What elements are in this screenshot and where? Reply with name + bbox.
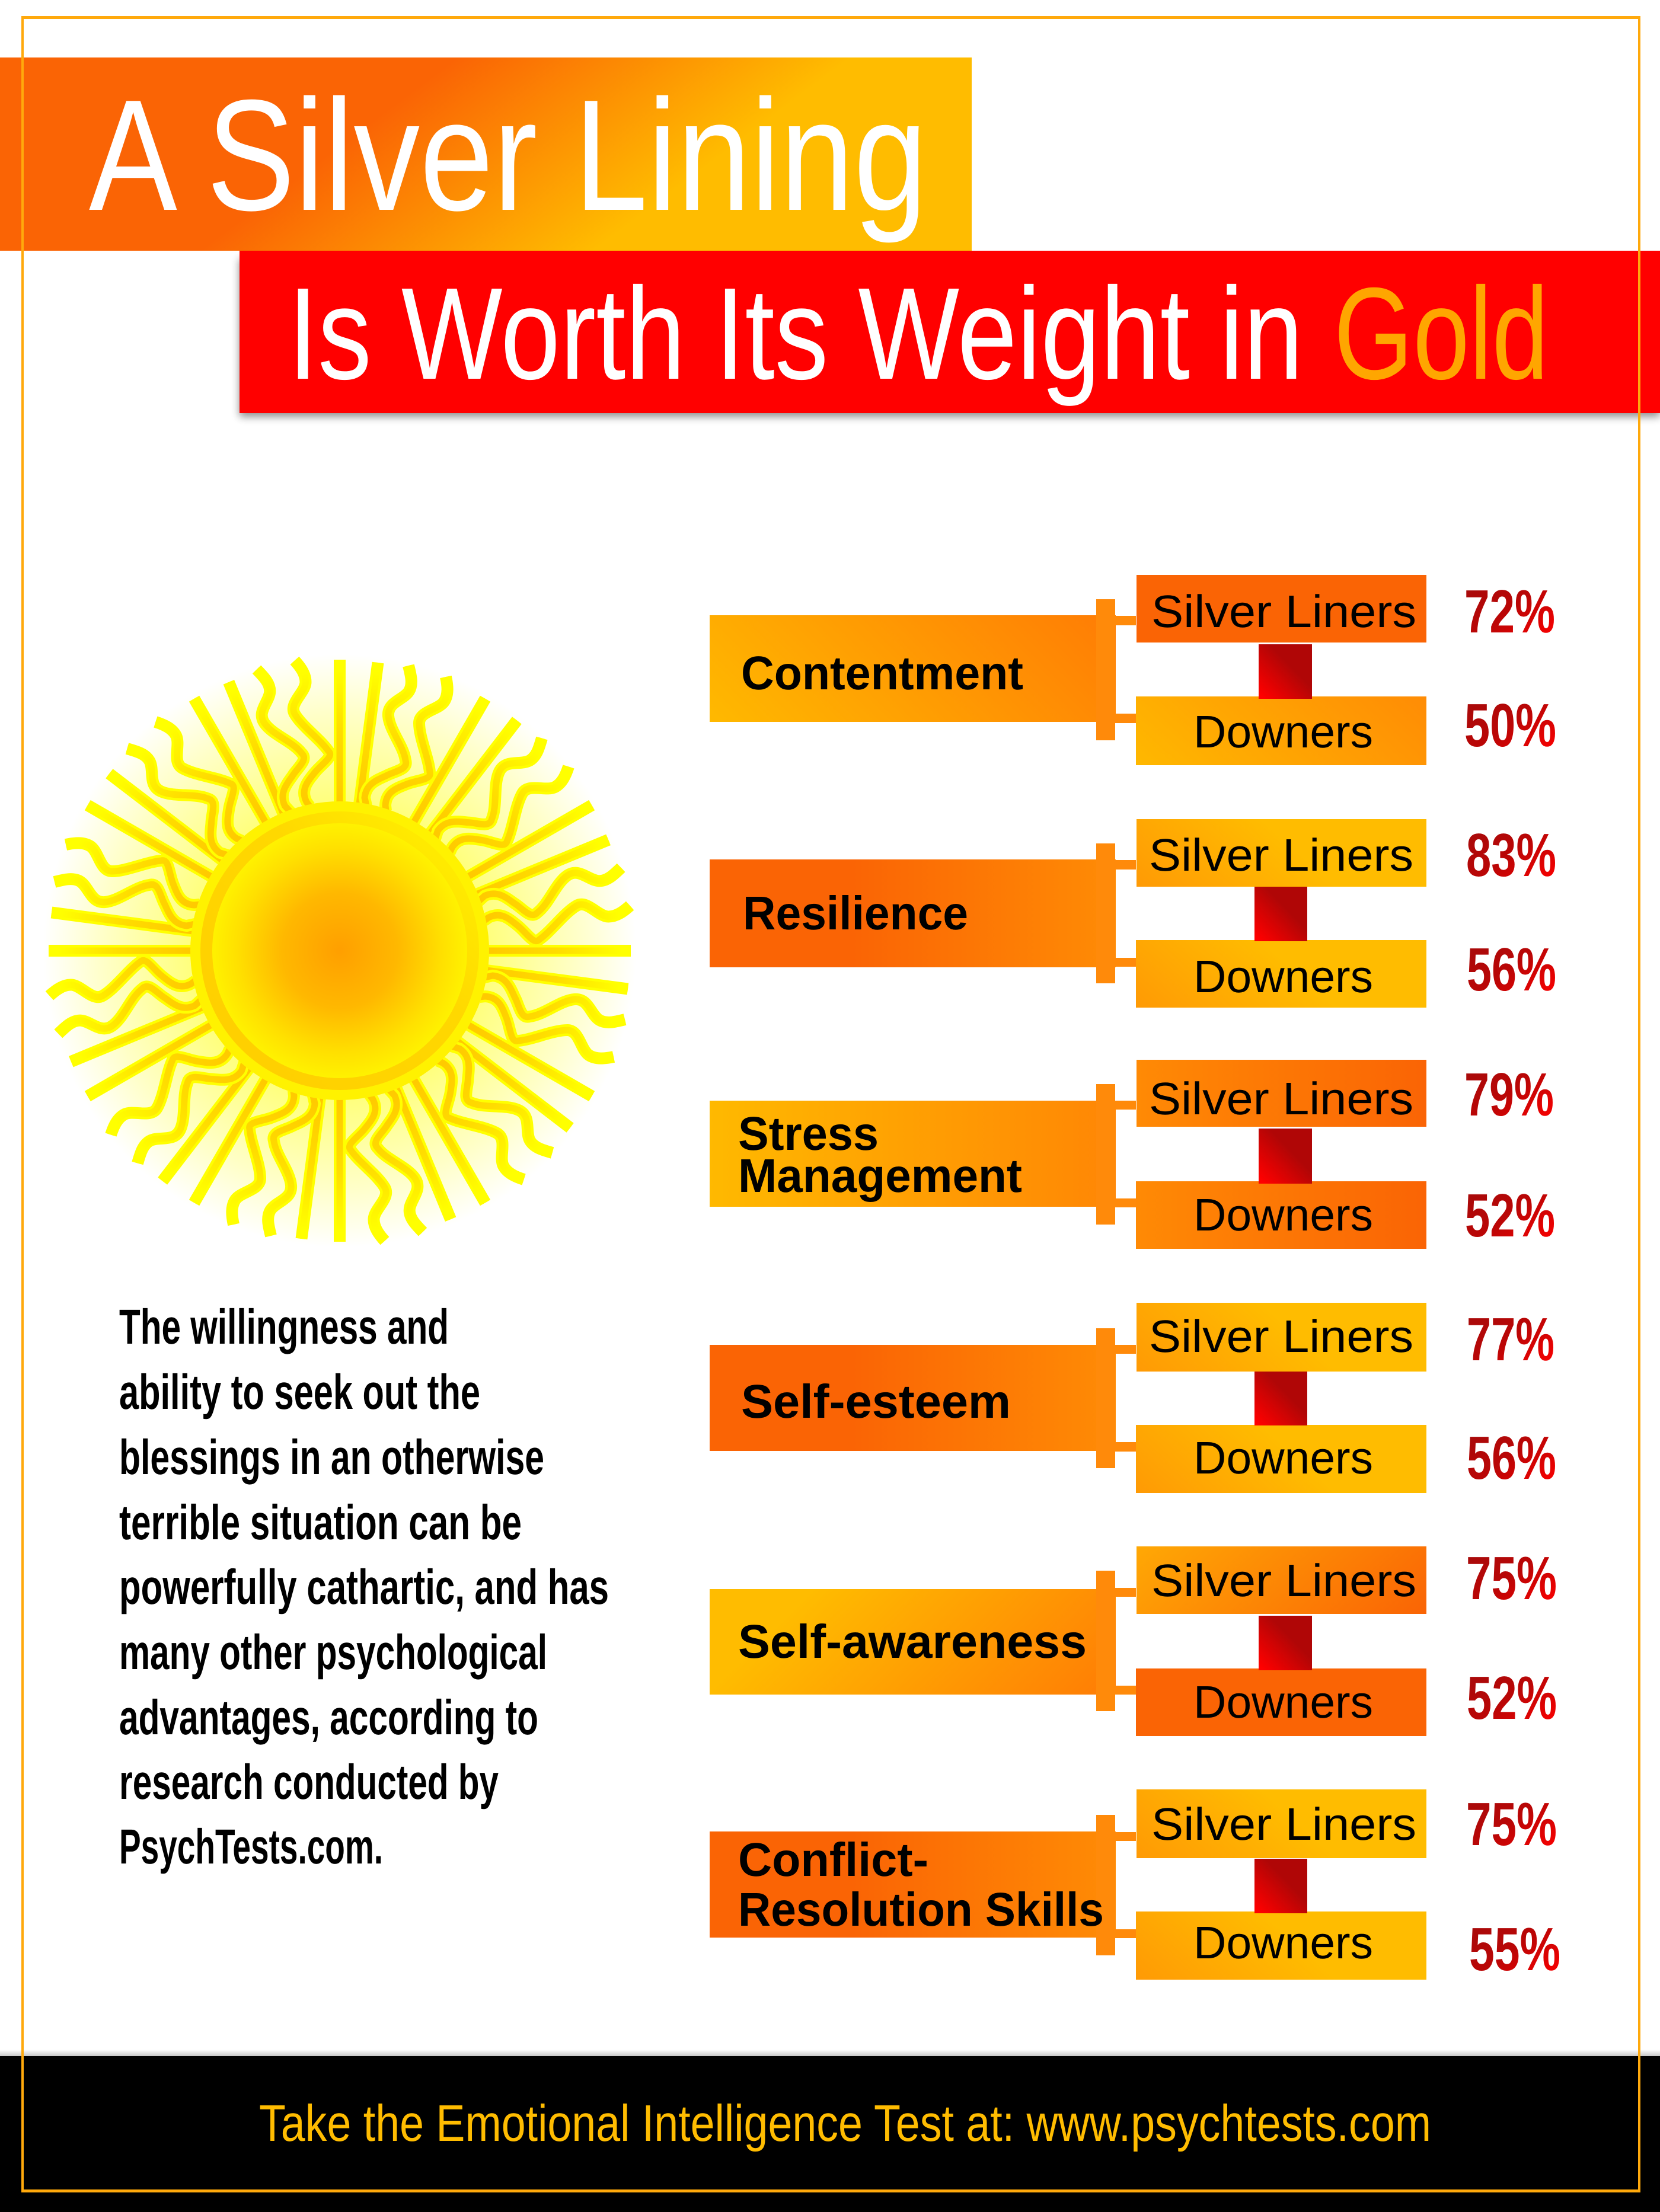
Silver Liners label: Silver Liners [1151,1799,1416,1850]
Silver Liners value: 83% [1466,821,1556,889]
connector [1096,599,1136,740]
category box [710,859,1116,967]
Downers box [1136,1911,1426,1980]
comparison block [1259,1129,1312,1184]
Silver Liners box [1137,819,1426,887]
category box [710,1345,1116,1451]
Downers label: Downers [1193,1190,1373,1241]
text block: description: The willingness and [119,1299,449,1354]
category label: Stress [738,1107,879,1160]
text block: description: research conducted by [119,1754,499,1810]
Silver Liners box [1137,1060,1426,1127]
category label: Self-awareness [738,1615,1087,1668]
connector [1096,1571,1136,1711]
category label: Conflict- [738,1833,928,1886]
Silver Liners value: 75% [1466,1790,1557,1858]
text block: description: terrible situation can be [119,1495,522,1550]
category label [738,1833,1104,1936]
Downers box [1136,1668,1426,1736]
text block: description: many other psychological [119,1625,547,1680]
category label: Management [738,1149,1022,1202]
comparison block [1254,1372,1307,1425]
Downers value: 56% [1467,935,1556,1003]
Silver Liners label: Silver Liners [1149,1311,1413,1362]
text block: description: PsychTests.com. [119,1819,383,1874]
comparison block [1259,644,1312,699]
icon: sun [34,645,646,1257]
Downers value: 50% [1464,691,1556,759]
Silver Liners label: Silver Liners [1151,586,1416,637]
text block: description: ability to seek out the [119,1364,480,1420]
text block: description [119,1299,609,1874]
Downers box [1136,1181,1426,1249]
panel: Resilience [710,819,1556,1008]
footer band: Take the Emotional Intelligence Test at: www.psychtests.com [259,2095,1431,2152]
Downers label: Downers [1193,1917,1373,1968]
Silver Liners box [1137,575,1426,642]
Downers box [1136,1425,1426,1493]
text block: description: powerfully cathartic, and has [119,1559,609,1615]
panel: Conflict-Resolution Skills [710,1789,1560,1983]
Silver Liners value: 77% [1467,1305,1554,1373]
category label [738,1107,1022,1202]
comparison block [1254,887,1307,941]
category label: Contentment [741,647,1023,699]
Downers label: Downers [1193,707,1373,757]
Downers label: Downers [1193,1677,1373,1728]
category box [710,1101,1116,1207]
comparison block [1254,1859,1307,1913]
Downers value: 52% [1467,1664,1557,1732]
category label: Self-esteem [741,1375,1011,1428]
Downers value: 55% [1469,1915,1560,1983]
title banner: Is Worth Its Weight in Gold: Gold [1334,260,1549,407]
Silver Liners value: 75% [1466,1544,1557,1612]
category box [710,615,1116,722]
Downers label: Downers [1193,951,1373,1002]
connector [1096,843,1136,983]
panel: Stress Management [710,1060,1555,1249]
Downers value: 52% [1465,1181,1555,1249]
Downers box [1136,696,1426,765]
category box [710,1589,1116,1695]
panel: Self-esteem [710,1303,1556,1493]
connector [1096,1084,1136,1225]
category box [710,1831,1116,1938]
Silver Liners label: Silver Liners [1149,1073,1413,1124]
category label: Resolution Skills [738,1883,1104,1936]
Downers label: Downers [1193,1433,1373,1484]
category label: Resilience [743,887,968,939]
text block: description: advantages, according to [119,1690,538,1745]
Silver Liners value: 79% [1464,1060,1554,1129]
Silver Liners box [1137,1789,1426,1858]
connector [1096,1815,1136,1955]
footer band [0,2050,1660,2212]
Silver Liners value: 72% [1464,577,1555,645]
title banner: A Silver Lining: A Silver Lining [89,66,927,244]
Downers box [1136,940,1426,1008]
panel: Self-awareness [710,1544,1557,1736]
title banner: Is Worth Its Weight in Gold: Is Worth Its Weight in [288,260,1303,407]
connector [1096,1328,1136,1468]
text block: description: blessings in an otherwise [119,1430,544,1485]
comparison block [1259,1616,1312,1670]
Downers value: 56% [1467,1424,1556,1492]
panel: Contentment [710,575,1556,765]
Silver Liners box [1137,1546,1426,1614]
Silver Liners label: Silver Liners [1151,1555,1416,1606]
Silver Liners box [1137,1303,1426,1372]
Silver Liners label: Silver Liners [1149,830,1413,881]
